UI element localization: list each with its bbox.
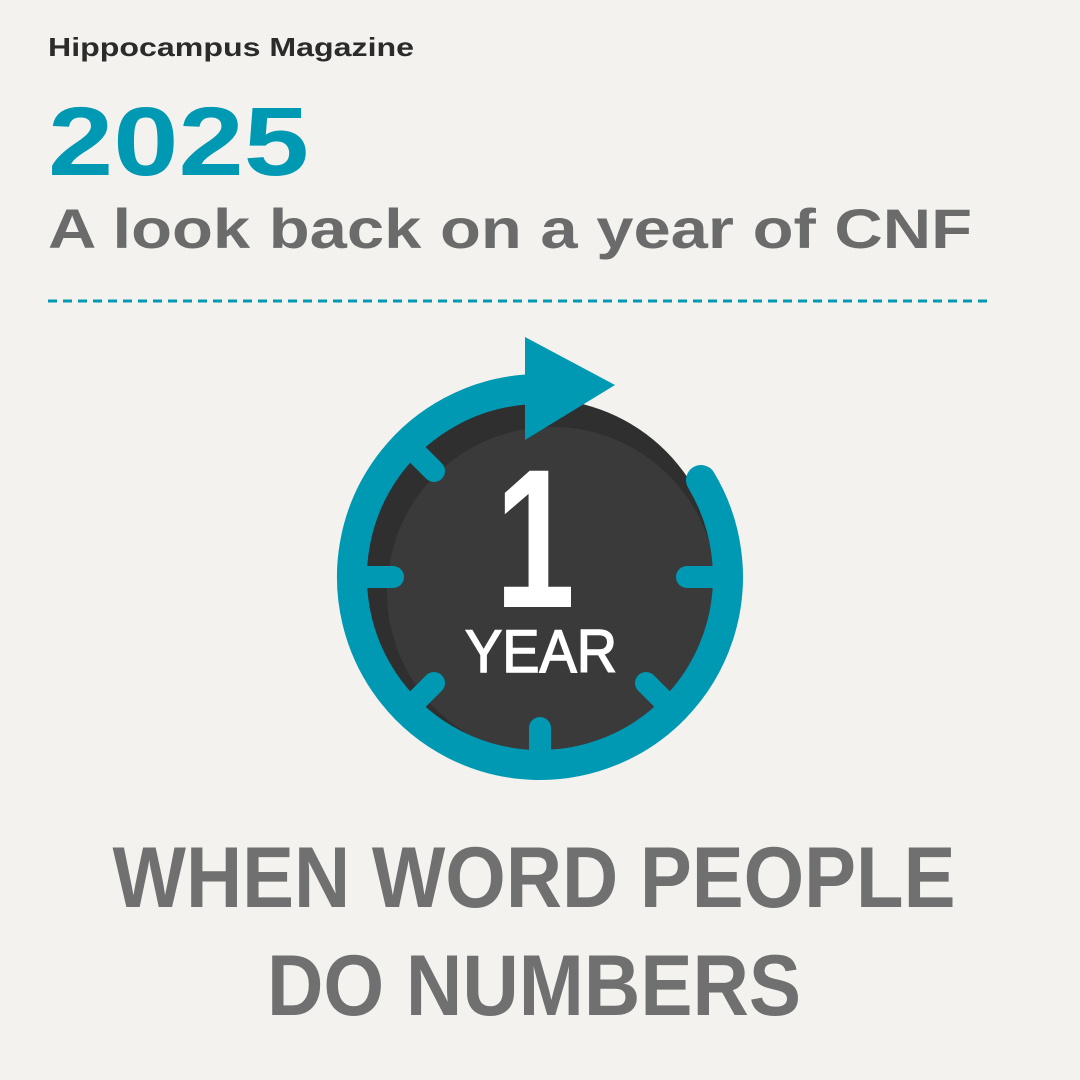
subtitle: A look back on a year of CNF [48, 197, 972, 260]
icon: clock one year [352, 337, 728, 765]
bottom headline: DO NUMBERS [267, 938, 801, 1034]
dashed divider [48, 300, 988, 302]
bottom headline: WHEN WORD PEOPLE [112, 830, 956, 926]
number 1: 1 [495, 428, 575, 649]
label YEAR: YEAR [465, 618, 617, 685]
brand name: Hippocampus Magazine [48, 32, 414, 62]
year heading: 2025 [48, 87, 309, 196]
bottom headline [112, 830, 956, 1034]
